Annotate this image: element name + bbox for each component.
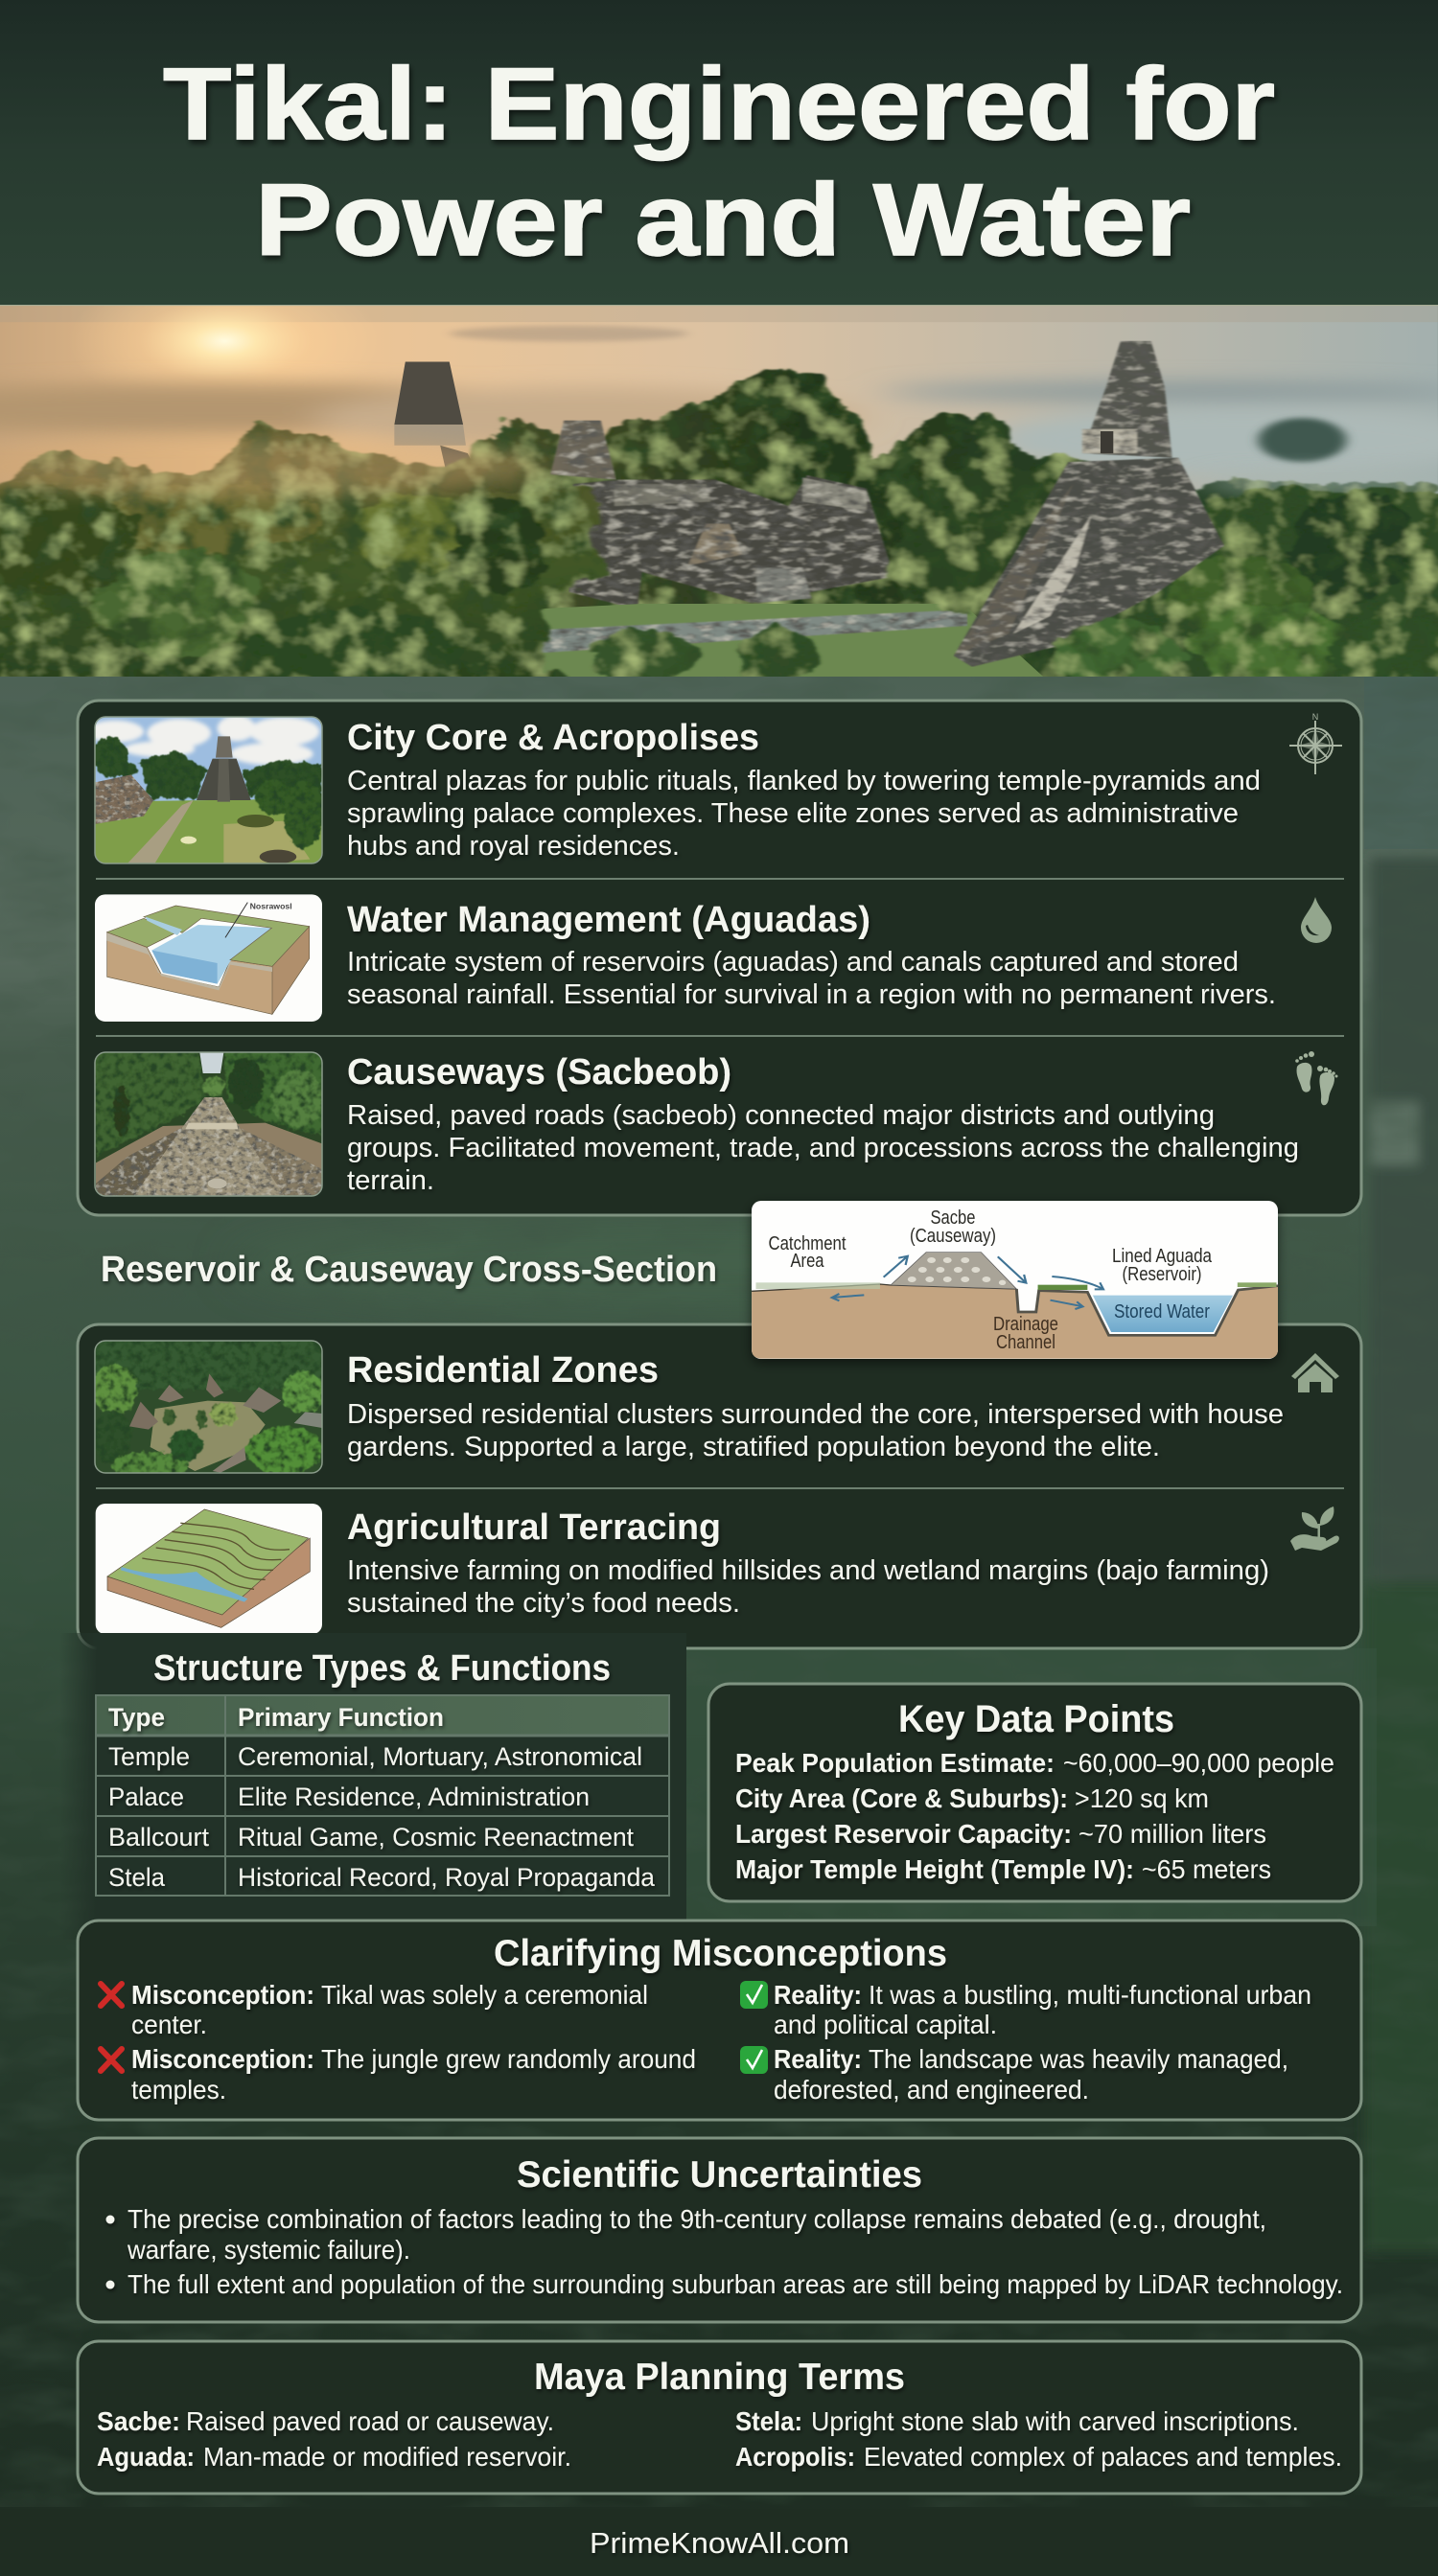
text block: water management description: seasonal rainfall. Essential for survival in a region with no permanent rivers.	[347, 979, 1276, 1010]
heading: city core: City Core & Acropolises	[347, 718, 759, 758]
text block: key figures: Major Temple Height (Temple IV):	[735, 1854, 1134, 1884]
text block: uncertainties list	[105, 2204, 1343, 2299]
text block: key figures: >120 sq km	[1075, 1783, 1209, 1813]
reality two: The landscape was heavily managed,	[869, 2044, 1288, 2074]
text block: glossary: Elevated complex of palaces and temples.	[864, 2442, 1342, 2472]
panel: clarifying misconceptions	[78, 1920, 1361, 2120]
text block: water management description	[347, 947, 1276, 1010]
reality two	[774, 2044, 1288, 2104]
text block: glossary: Acropolis:	[735, 2442, 855, 2472]
panel: key data points	[708, 1684, 1361, 1901]
reality one: Reality:	[774, 1980, 862, 2010]
diagram: reservoir and causeway cross-section card: Sacbe	[930, 1208, 976, 1229]
misconception two: The jungle grew randomly around	[321, 2044, 696, 2074]
heading: maya planning terms: Maya Planning Terms	[534, 2357, 905, 2398]
table: structure types: Palace	[108, 1782, 184, 1811]
misconception one: Tikal was solely a ceremonial	[321, 1980, 648, 2010]
diagram: reservoir and causeway cross-section card: (Causeway)	[910, 1226, 996, 1247]
text block: glossary	[97, 2406, 1342, 2472]
diagram: reservoir and causeway cross-section card: Stored Water	[1114, 1301, 1210, 1322]
reality one: It was a bustling, multi-functional urban	[869, 1980, 1311, 2010]
text block: key figures: ~60,000–90,000 people	[1063, 1748, 1334, 1778]
panel: maya planning terms	[78, 2341, 1361, 2494]
text block: causeways description: groups. Facilitated movement, trade, and processions across the challenging	[347, 1133, 1299, 1163]
table: structure types: Type	[108, 1703, 165, 1732]
misconception one: Misconception:	[131, 1980, 314, 2010]
text block: residential description: Dispersed residential clusters surrounded the core, interspersed with house	[347, 1399, 1284, 1430]
misconception one	[131, 1980, 648, 2039]
heading: causeways: Causeways (Sacbeob)	[347, 1052, 731, 1092]
text block: key figures: City Area (Core & Suburbs):	[735, 1783, 1068, 1813]
icon: water drop	[1301, 897, 1332, 943]
diagram: reservoir and causeway cross-section card: Channel	[996, 1332, 1055, 1353]
icon: red cross	[101, 1984, 122, 2006]
panel: urban zones group one	[78, 701, 1361, 1215]
misconception one: center.	[131, 2010, 207, 2039]
text block: causeways description: terrain.	[347, 1165, 434, 1196]
diagram: reservoir and causeway cross-section card	[752, 1201, 1278, 1359]
icon: house	[1291, 1353, 1339, 1392]
diagram: reservoir and causeway cross-section card: (Reservoir)	[1122, 1264, 1202, 1285]
table: structure types: Temple	[108, 1742, 190, 1771]
text block: terracing description: Intensive farming on modified hillsides and wetland margins (bajo farming)	[347, 1555, 1269, 1586]
text block: causeways description: Raised, paved roads (sacbeob) connected major districts and outlying	[347, 1100, 1215, 1131]
table: structure types: Elite Residence, Administration	[238, 1782, 590, 1811]
text block: causeways description	[347, 1100, 1299, 1196]
text block: uncertainties list: The full extent and population of the surrounding suburban areas are still being mapped by LiDAR technology.	[128, 2269, 1343, 2299]
panel: structure types and functions	[59, 1633, 686, 1940]
text block: glossary: Aguada:	[97, 2442, 195, 2472]
text block: terracing description	[347, 1555, 1269, 1619]
title: Tikal: Engineered for	[163, 46, 1275, 161]
text block: glossary: Sacbe:	[97, 2406, 180, 2436]
diagram: reservoir and causeway cross-section card: Area	[790, 1251, 824, 1272]
icon: green check	[740, 1981, 768, 2009]
left temple comb	[394, 362, 470, 468]
heading: agricultural terracing: Agricultural Terracing	[347, 1507, 721, 1548]
right temple	[954, 341, 1224, 667]
thumbnail: residential cluster aerial photo	[96, 1342, 322, 1472]
text block: key figures: Peak Population Estimate:	[735, 1748, 1055, 1778]
heading: reservoir and causeway cross-section: Reservoir & Causeway Cross-Section	[101, 1250, 717, 1290]
text block: terracing description: sustained the city’s food needs.	[347, 1588, 740, 1619]
text block: residential description: gardens. Supported a large, stratified population beyond the elite.	[347, 1432, 1160, 1462]
heading: clarifying misconceptions: Clarifying Misconceptions	[494, 1933, 947, 1974]
text block: city core description: Central plazas for public rituals, flanked by towering temple-pyramids and	[347, 766, 1261, 796]
text block: key figures	[735, 1748, 1334, 1884]
heading: water management: Water Management (Aguadas)	[347, 900, 870, 940]
text block: glossary: Raised paved road or causeway.	[186, 2406, 554, 2436]
heading: structure types: Structure Types & Functions	[153, 1648, 611, 1689]
diagram: reservoir and causeway cross-section card: Catchment	[769, 1233, 847, 1254]
footer: site credit: PrimeKnowAll.com	[590, 2526, 849, 2560]
reality one: and political capital.	[774, 2010, 997, 2039]
table: structure types: Primary Function	[238, 1703, 444, 1732]
text block: glossary: Upright stone slab with carved inscriptions.	[811, 2406, 1299, 2436]
text block: key figures: Largest Reservoir Capacity:	[735, 1819, 1072, 1849]
table: structure types: Ceremonial, Mortuary, Astronomical	[238, 1742, 642, 1771]
thumbnail: agricultural terracing block diagram	[96, 1504, 322, 1634]
table: structure types	[96, 1695, 669, 1896]
text block: key figures: ~70 million liters	[1078, 1819, 1266, 1849]
reality two: deforested, and engineered.	[774, 2075, 1089, 2104]
diagram: reservoir and causeway cross-section card: Lined Aguada	[1112, 1246, 1213, 1267]
misconception two: temples.	[131, 2075, 226, 2104]
text block: glossary: Stela:	[735, 2406, 802, 2436]
table: structure types: Ballcourt	[108, 1823, 209, 1852]
text block: residential description	[347, 1399, 1284, 1462]
text block: uncertainties list: warfare, systemic failure).	[127, 2235, 410, 2265]
table: structure types: Stela	[108, 1863, 166, 1892]
page background: misty jungle and ruins	[0, 677, 1438, 2576]
icon: footprints	[1295, 1051, 1338, 1105]
misconception two: Misconception:	[131, 2044, 314, 2074]
panel: scientific uncertainties	[78, 2138, 1361, 2322]
text block: city core description	[347, 766, 1261, 862]
text block: water management description: Intricate system of reservoirs (aguadas) and canals captured and stored	[347, 947, 1239, 978]
text block: city core description: sprawling palace complexes. These elite zones served as administrative	[347, 798, 1239, 829]
icon: green check	[740, 2046, 768, 2074]
text block: city core description: hubs and royal residences.	[347, 831, 680, 862]
text block: uncertainties list: The precise combination of factors leading to the 9th-century collapse remains debated (e.g., drought,	[128, 2204, 1266, 2234]
thumbnail: aguada reservoir block diagram	[95, 894, 322, 1022]
title	[163, 46, 1275, 277]
panel: urban zones group two	[78, 1324, 1361, 1648]
heading: key data points: Key Data Points	[898, 1698, 1174, 1740]
diagram: reservoir and causeway cross-section card: Drainage	[993, 1314, 1058, 1335]
reality two: Reality:	[774, 2044, 862, 2074]
table: structure types: Ritual Game, Cosmic Reenactment	[238, 1823, 634, 1852]
hero photo: Tikal temples rising from jungle at sunrise	[0, 305, 1438, 677]
icon: compass: N	[1312, 712, 1318, 722]
icon: red cross	[101, 2049, 122, 2071]
thumbnail: city core photo	[86, 716, 326, 865]
text block: glossary: Man-made or modified reservoir.	[203, 2442, 571, 2472]
icon: plant in hand	[1290, 1506, 1339, 1551]
thumbnail: aguada reservoir block diagram: Nosrawosl	[250, 902, 292, 910]
icon: compass	[1289, 712, 1342, 774]
table: structure types: Historical Record, Royal Propaganda	[238, 1863, 656, 1892]
heading: scientific uncertainties: Scientific Uncertainties	[517, 2154, 922, 2196]
misconception two	[131, 2044, 696, 2104]
header band	[0, 0, 1438, 305]
title: Power and Water	[255, 162, 1191, 277]
heading: residential zones: Residential Zones	[347, 1350, 659, 1391]
thumbnail: stone causeway through forest	[93, 1051, 326, 1198]
text block: key figures: ~65 meters	[1142, 1854, 1271, 1884]
reality one	[774, 1980, 1311, 2039]
